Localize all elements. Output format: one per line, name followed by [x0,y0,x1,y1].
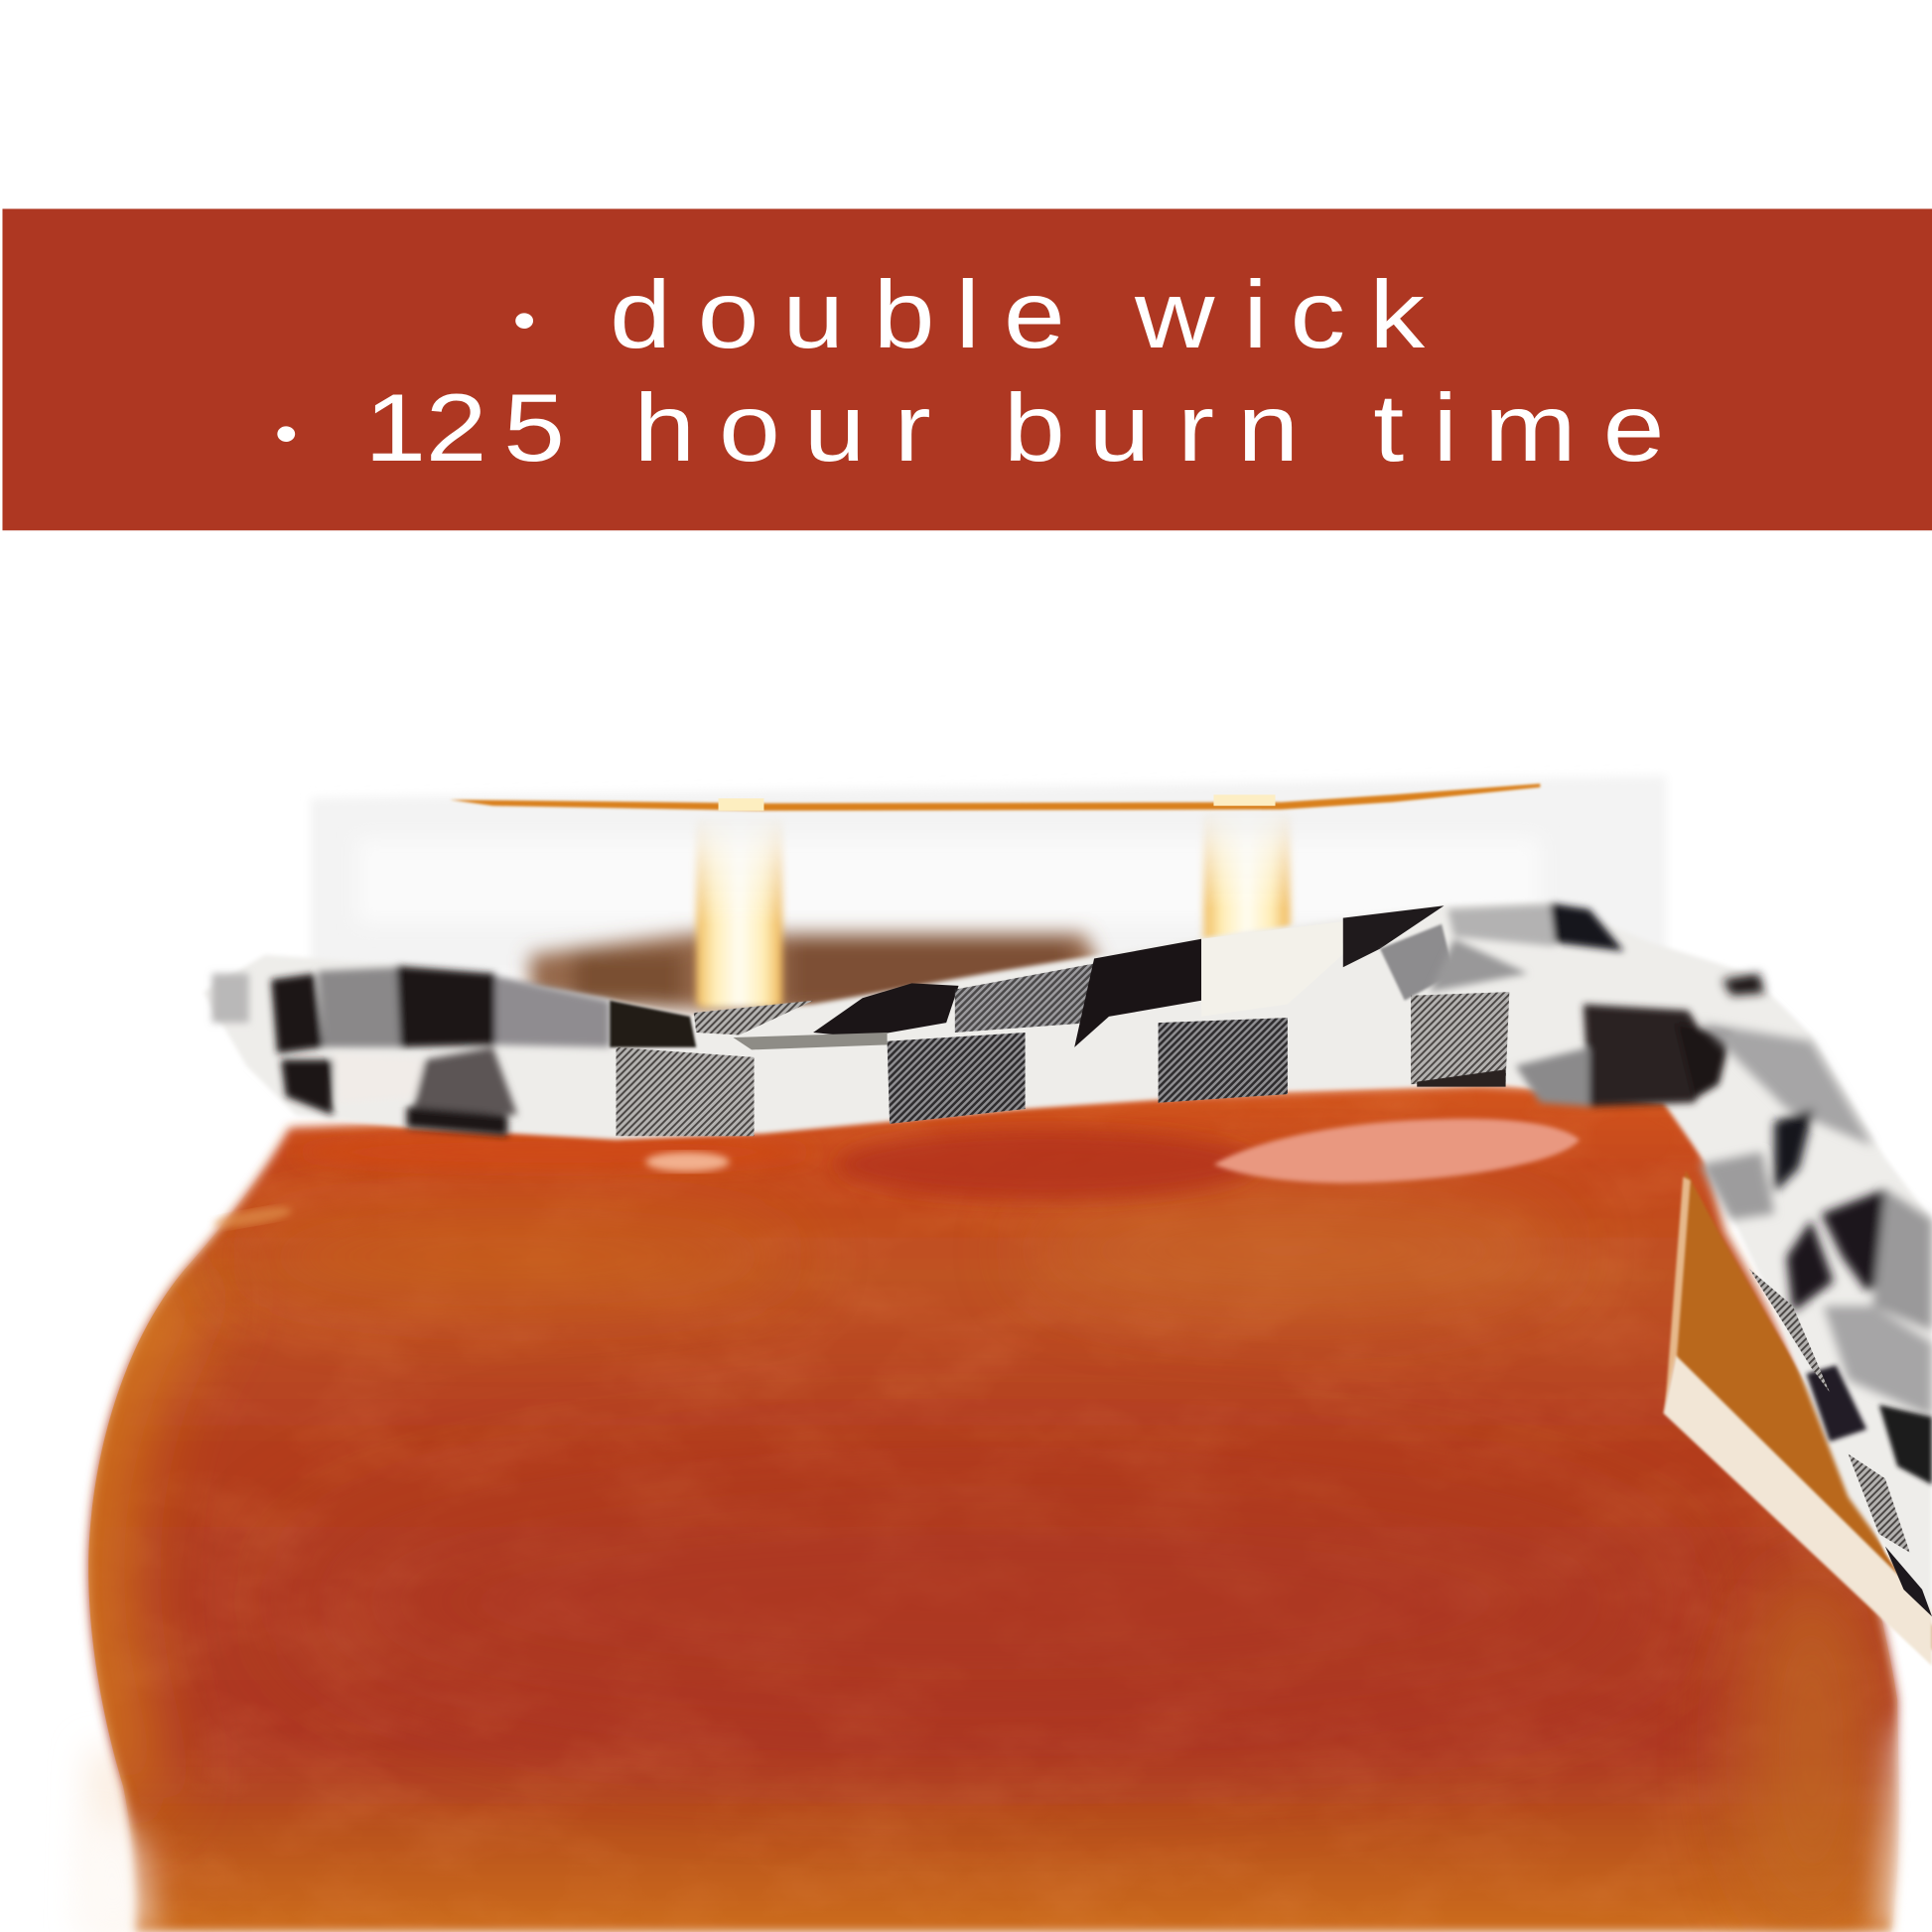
line two: 125 hour burn time: 125 hour burn time [364,375,1665,483]
line two: 125 hour burn time: • [275,403,298,467]
upper band centre checks [610,1001,696,1047]
tag white edge [1663,1355,1932,1666]
ribbon tail checks [1701,973,1932,1417]
tag edge line [1665,1176,1691,1414]
line one: double wick: • [513,289,536,353]
outer soft glow [83,1749,154,1932]
right shoulder checks [1430,903,1731,1106]
candle wax body [73,1084,1932,1932]
flame: right wick [1198,794,1297,939]
flame: left wick [696,798,782,1008]
soot smudge behind ribbon [530,934,1103,1023]
lower right fade [1879,1725,1932,1932]
amber back of tag [1673,1171,1932,1651]
wax colour variation [73,1084,1922,1932]
gingham ribbon [204,901,1932,1616]
shoulder glint [212,1203,293,1231]
small highlight [645,1152,730,1172]
candle jar glass neck [311,776,1666,973]
hanging tag [1663,1171,1932,1666]
lower band checks [617,1047,755,1136]
wax rim line [450,783,1540,811]
lower left fade [73,1811,154,1932]
ribbon base [204,901,1932,1614]
blurred left end checks [211,966,610,1136]
line one: double wick: double wick [610,262,1426,368]
feature banner [2,208,1932,530]
wax highlight [1213,1119,1580,1183]
